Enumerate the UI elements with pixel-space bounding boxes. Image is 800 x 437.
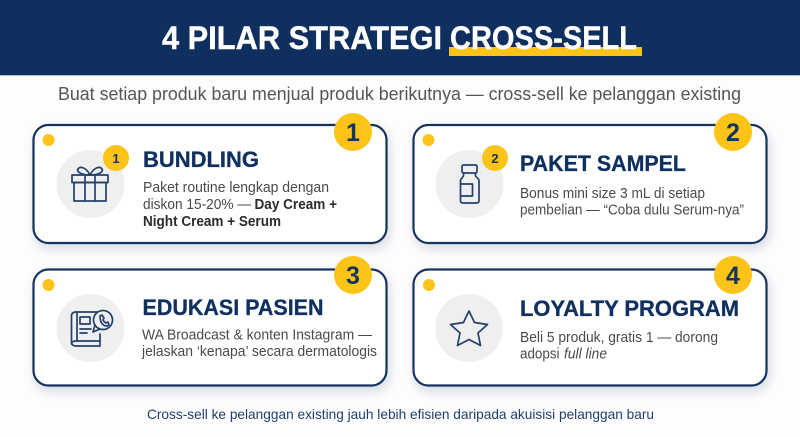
text: edukasi pasien description: jelaskan ‘kenapa’ secara dermatologis (141, 344, 377, 360)
icon: gift (56, 145, 129, 218)
text: loyalty program description: full line (564, 346, 607, 362)
number badge 3 (334, 256, 372, 294)
accent dot (42, 134, 54, 146)
number badge 3: 3 (346, 262, 360, 290)
panel: paket sampel (414, 113, 766, 243)
number badge 2: 2 (726, 119, 740, 147)
number badge 2 (714, 113, 752, 151)
text: edukasi pasien description (141, 328, 377, 360)
number badge 1: 1 (346, 119, 360, 147)
footer note: Cross-sell ke pelanggan existing jauh lebih efisien daripada akuisisi pelanggan baru (147, 406, 654, 422)
title: CROSS-SELL (450, 20, 637, 56)
text: bundling description: Night Cream + Serum (143, 214, 281, 230)
icon: book with chat bubble (56, 294, 124, 362)
heading: loyalty program: LOYALTY PROGRAM (520, 296, 739, 321)
text: bundling description: Paket routine lengkap dengan (143, 180, 329, 196)
text: loyalty program description: Beli 5 produk, gratis 1 — dorong (520, 330, 718, 346)
accent dot (423, 279, 435, 291)
icon: gift: 1 (112, 151, 120, 166)
text: paket sampel description: pembelian — “Coba dulu Serum-nya” (520, 202, 744, 218)
panel: loyalty program (414, 256, 766, 386)
text: edukasi pasien description: WA Broadcast & konten Instagram — (142, 328, 372, 344)
number badge 4: 4 (726, 262, 740, 290)
text: loyalty program description (520, 330, 718, 362)
heading: bundling: BUNDLING (143, 147, 259, 172)
text: loyalty program description: adopsi (520, 346, 560, 362)
accent dot (422, 134, 434, 146)
text: paket sampel description (520, 186, 744, 218)
header banner (0, 0, 800, 76)
number badge 4 (714, 256, 752, 294)
text: bundling description: Day Cream + (254, 197, 337, 213)
subtitle: Buat setiap produk baru menjual produk berikutnya — cross-sell ke pelanggan existing (58, 83, 741, 104)
icon: bottle (436, 145, 508, 218)
heading: edukasi pasien: EDUKASI PASIEN (142, 295, 324, 320)
accent dot (42, 279, 54, 291)
icon: bottle: 2 (491, 151, 499, 166)
heading: paket sampel: PAKET SAMPEL (520, 151, 686, 176)
title: 4 PILAR STRATEGI (162, 20, 442, 56)
text: bundling description: diskon 15-20% — (143, 197, 251, 213)
panel: bundling (34, 113, 386, 243)
title (162, 20, 642, 56)
panel: edukasi pasien (34, 256, 386, 386)
text: paket sampel description: Bonus mini size 3 mL di setiap (520, 186, 705, 202)
number badge 1 (334, 113, 372, 151)
text: bundling description (143, 180, 337, 230)
icon: star (435, 294, 503, 362)
